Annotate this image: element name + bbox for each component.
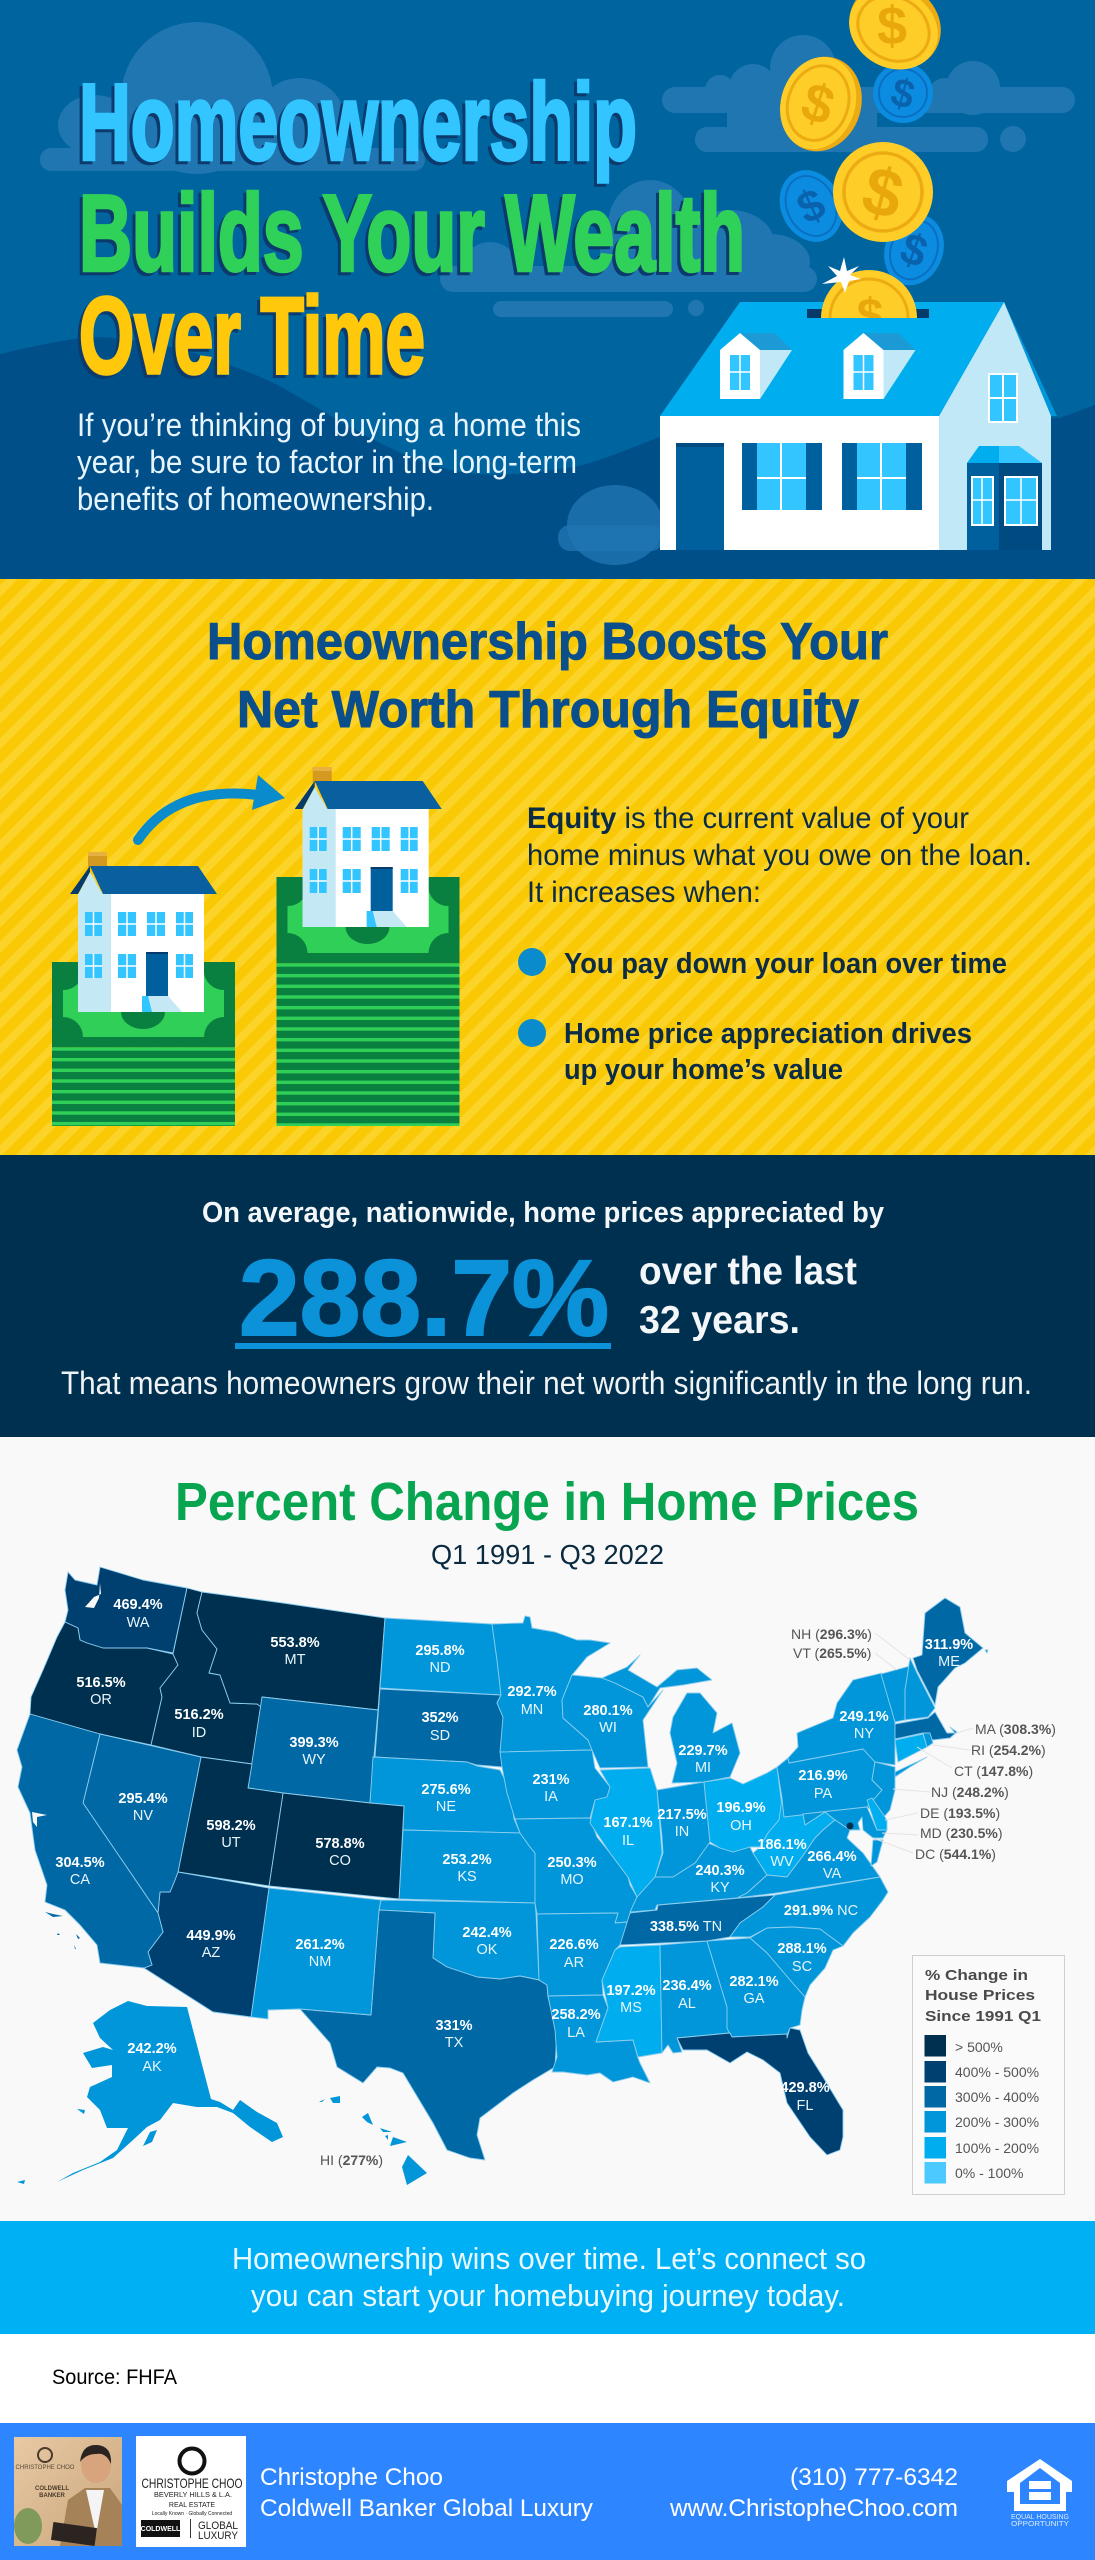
state: ME <box>913 1598 988 1705</box>
leader lines and outside labels: CT (147.8%) <box>954 1763 1033 1779</box>
equity explanation: Equity is the current value of your <box>527 802 969 835</box>
state: AL <box>660 1941 730 2053</box>
state: AR <box>537 1913 628 1996</box>
legend labels: 100% - 200% <box>955 2140 1039 2156</box>
state value labels: 429.8% <box>780 2080 830 2096</box>
legend swatches <box>924 2035 946 2184</box>
lead text: On average, nationwide, home prices appreciated by <box>202 1197 884 1229</box>
state: MN <box>492 1616 610 1752</box>
state value labels: 236.4% <box>662 1978 712 1994</box>
gable window <box>989 374 1017 422</box>
state: TX <box>300 1910 557 2160</box>
leader lines and outside labels: DC (544.1%) <box>915 1846 996 1862</box>
icon: money stack left <box>52 962 235 1126</box>
state value labels: 242.4% <box>462 1925 512 1941</box>
state: NY <box>788 1673 927 1777</box>
state value labels: LA <box>567 2025 585 2041</box>
legend labels: 200% - 300% <box>955 2114 1039 2130</box>
blue coin lower left <box>768 160 854 252</box>
door <box>676 443 724 550</box>
company logo: CHRISTOPHE CHOO <box>142 2475 243 2491</box>
state value labels: 304.5% <box>55 1855 105 1871</box>
state value labels: 217.5% <box>657 1807 707 1823</box>
state value labels: MN <box>521 1702 543 1718</box>
state value labels: WI <box>599 1720 617 1736</box>
agent name: Coldwell Banker Global Luxury <box>260 2495 593 2522</box>
state value labels: SD <box>430 1728 450 1744</box>
state value labels: KS <box>457 1869 477 1885</box>
agent photo: BANKER <box>39 2493 65 2499</box>
state: UT <box>178 1757 283 1886</box>
icon: tall house <box>295 767 442 927</box>
period text <box>639 1250 857 1342</box>
state value labels: 261.2% <box>295 1937 345 1953</box>
map title: Percent Change in Home Prices <box>175 1472 919 1532</box>
state value labels: AK <box>142 2059 162 2075</box>
panel: call to action: you can start your homebuying journey today. <box>251 2278 845 2313</box>
contact details: (310) 777-6342 <box>790 2464 958 2491</box>
icon: equal housing opportunity: EQUAL HOUSING <box>1011 2514 1069 2521</box>
state value labels: 311.9% <box>925 1637 973 1653</box>
icon: equal housing opportunity <box>1007 2459 1072 2528</box>
state: VT <box>881 1666 910 1722</box>
state: LA <box>548 1995 650 2083</box>
state: NC <box>730 1877 888 1946</box>
state: KS <box>399 1830 535 1903</box>
state value labels: 352% <box>421 1710 459 1726</box>
dormer left <box>720 333 792 399</box>
state value labels: 291.9% NC <box>784 1903 858 1919</box>
blue coin lower right <box>874 206 954 294</box>
state value labels: ME <box>938 1654 960 1670</box>
arrow <box>138 775 285 840</box>
contact details <box>669 2464 958 2522</box>
state: VA <box>737 1820 883 1898</box>
eastern states map <box>492 1598 988 2155</box>
dormer right <box>844 333 916 399</box>
western states map <box>17 1567 557 2185</box>
state: SC <box>750 1927 843 1997</box>
state value labels: 598.2% <box>206 1818 256 1834</box>
state value labels: 167.1% <box>603 1815 653 1831</box>
state value labels: IL <box>622 1833 634 1849</box>
company logo: Locally Known · Globally Connected <box>152 2511 232 2517</box>
leader lines and outside labels: MA (308.3%) <box>975 1721 1056 1737</box>
state: TN <box>620 1895 775 1945</box>
state value labels: 282.1% <box>729 1974 779 1990</box>
state: ND <box>380 1618 501 1695</box>
state: CT <box>895 1734 927 1762</box>
state value labels: 196.9% <box>716 1800 766 1816</box>
blue coin lower left: $ <box>790 179 833 234</box>
state value labels: 250.3% <box>547 1855 597 1871</box>
state value labels: SC <box>792 1959 812 1975</box>
bullet: pay down: You pay down your loan over time <box>564 948 1007 980</box>
gold coin large: $ <box>855 151 911 235</box>
gold coin top <box>833 0 957 86</box>
bullet: appreciation <box>518 1018 972 1086</box>
state value labels: OK <box>477 1942 498 1958</box>
legend <box>912 1956 1064 2194</box>
state value labels: KY <box>710 1880 730 1896</box>
equity explanation <box>527 802 1032 909</box>
state value labels: NE <box>436 1799 456 1815</box>
state value labels: 469.4% <box>113 1597 163 1613</box>
period text: over the last <box>639 1250 857 1293</box>
state value labels: 338.5% TN <box>650 1919 722 1935</box>
state value labels: MO <box>560 1872 584 1888</box>
state: OR <box>30 1622 178 1745</box>
state value labels: 516.5% <box>76 1675 126 1691</box>
leader lines and outside labels: DE (193.5%) <box>920 1805 1000 1821</box>
marker: DC <box>846 1822 854 1830</box>
state: DE <box>867 1798 887 1830</box>
state value labels: CA <box>70 1872 90 1888</box>
state: ID <box>151 1588 262 1764</box>
California islands <box>45 1912 80 1949</box>
state: NE <box>370 1757 520 1833</box>
title: Homeownership <box>79 62 637 184</box>
state: AK <box>17 2001 283 2184</box>
company logo: BEVERLY HILLS & L.A. <box>154 2492 232 2499</box>
state: NJ <box>867 1762 895 1818</box>
state value labels: TX <box>445 2035 464 2051</box>
state value labels: 258.2% <box>551 2007 601 2023</box>
state value labels: 231% <box>532 1772 570 1788</box>
state value labels: UT <box>221 1835 241 1851</box>
leader lines and outside labels: VT (265.5%) <box>793 1645 871 1661</box>
state value labels: GA <box>744 1991 765 2007</box>
state: HI <box>319 2096 427 2185</box>
state: WA <box>65 1567 187 1653</box>
agent photo: CHRISTOPHE CHOO <box>16 2465 75 2471</box>
icon: equal housing opportunity: OPPORTUNITY <box>1011 2521 1069 2528</box>
state value labels: 578.8% <box>315 1836 365 1852</box>
state value labels: 288.1% <box>777 1941 827 1957</box>
water: Puget Sound and San Francisco Bay <box>32 1583 101 1827</box>
leader lines and outside labels: NJ (248.2%) <box>931 1784 1009 1800</box>
equity explanation: home minus what you owe on the loan. <box>527 839 1032 872</box>
leader lines and outside labels: MD (230.5%) <box>920 1825 1002 1841</box>
background hills <box>0 337 1095 579</box>
panel: source: Source: FHFA <box>52 2366 177 2389</box>
coin slot <box>807 257 929 343</box>
state: WI <box>562 1675 663 1768</box>
state: MO <box>515 1818 637 1923</box>
state value labels: CO <box>329 1853 351 1869</box>
state value labels: 242.2% <box>127 2041 177 2057</box>
state: PA <box>777 1749 882 1817</box>
conclusion text: That means homeowners grow their net worth significantly in the long run. <box>61 1365 1032 1401</box>
state: NV <box>83 1734 201 1913</box>
state value labels: 197.2% <box>606 1983 656 1999</box>
state value labels: 266.4% <box>807 1849 857 1865</box>
state: IL <box>590 1768 662 1897</box>
company logo: LUXURY <box>198 2530 239 2542</box>
heading <box>207 613 888 739</box>
legend labels: > 500% <box>955 2039 1003 2055</box>
panel: call to action <box>0 2221 1095 2334</box>
agent name <box>260 2464 593 2522</box>
state value labels: OH <box>730 1818 752 1834</box>
state value labels: 295.8% <box>415 1643 465 1659</box>
agent photo: COLDWELL <box>35 2486 69 2492</box>
map subtitle: Q1 1991 - Q3 2022 <box>431 1539 664 1570</box>
intro text: year, be sure to factor in the long-term <box>77 444 577 480</box>
state value labels: PA <box>814 1786 832 1802</box>
state: MT <box>197 1592 385 1710</box>
panel: call to action: Homeownership wins over time. Let’s connect so <box>232 2241 866 2276</box>
state value labels: MS <box>620 2000 642 2016</box>
bullet: appreciation: Home price appreciation drives <box>564 1018 972 1050</box>
state value labels: 553.8% <box>270 1635 320 1651</box>
state value labels: 449.9% <box>186 1928 236 1944</box>
state value labels: 516.2% <box>174 1707 224 1723</box>
legend labels: 0% - 100% <box>955 2165 1023 2181</box>
state value labels: WA <box>127 1615 150 1631</box>
state: CO <box>269 1793 404 1899</box>
state: CA <box>17 1714 163 1968</box>
state: AZ <box>144 1872 269 2017</box>
state value labels: MT <box>285 1652 306 1668</box>
intro text: benefits of homeownership. <box>77 481 434 517</box>
panel: footer <box>0 2423 1095 2560</box>
icon: money stack right <box>276 877 460 1126</box>
state: OH <box>704 1767 782 1852</box>
state: MI <box>602 1655 740 1783</box>
state value labels: 292.7% <box>507 1684 557 1700</box>
leader lines and outside labels: RI (254.2%) <box>971 1742 1046 1758</box>
blue coin: $ <box>886 70 919 118</box>
period text: 32 years. <box>639 1299 800 1342</box>
panel: source <box>0 2334 1095 2423</box>
legend title <box>925 1967 1041 2025</box>
legend title: Since 1991 Q1 <box>925 2008 1041 2025</box>
legend title: % Change in <box>925 1967 1028 1984</box>
window right <box>842 443 922 510</box>
equity explanation: It increases when: <box>527 876 761 909</box>
big number: 288.7% <box>239 1237 609 1358</box>
gold coin middle <box>768 46 874 162</box>
state value labels: IA <box>544 1789 558 1805</box>
contact details: www.ChristopheChoo.com <box>669 2495 958 2522</box>
state value labels: 331% <box>435 2018 473 2034</box>
state value labels: ND <box>430 1660 450 1676</box>
state: MD <box>803 1807 887 1838</box>
title: Over Time <box>79 275 425 397</box>
state value labels: VA <box>823 1866 841 1882</box>
panel: nationwide statistic <box>0 1155 1095 1437</box>
state value labels: 216.9% <box>798 1768 848 1784</box>
agent name: Christophe Choo <box>260 2464 443 2491</box>
state value labels: 249.1% <box>839 1709 889 1725</box>
state value labels: 399.3% <box>289 1735 339 1751</box>
state value labels: FL <box>797 2098 813 2114</box>
state value labels: AZ <box>202 1945 220 1961</box>
leader lines and outside labels: NH (296.3%) <box>791 1626 872 1642</box>
state: MS <box>596 1945 662 2057</box>
state value labels: 240.3% <box>695 1863 745 1879</box>
state: FL <box>677 2028 843 2155</box>
state value labels: 229.7% <box>678 1743 728 1759</box>
leader lines and outside labels: HI (277%) <box>320 2152 383 2168</box>
state: NH <box>905 1658 935 1720</box>
state value labels: 186.1% <box>757 1837 807 1853</box>
bullet: appreciation: up your home’s value <box>564 1054 843 1086</box>
state value labels: AR <box>564 1955 584 1971</box>
company logo <box>136 2436 246 2547</box>
state value labels: OR <box>90 1692 112 1708</box>
blue coin lower right: $ <box>894 223 934 278</box>
intro text <box>77 407 581 517</box>
state: WV <box>753 1798 835 1877</box>
coin slot: $ <box>857 290 884 343</box>
state: GA <box>707 1938 805 2037</box>
state value labels: NV <box>133 1808 153 1824</box>
state value labels: MI <box>695 1760 711 1776</box>
window left <box>742 443 822 510</box>
legend title: House Prices <box>925 1987 1035 2004</box>
icon: small house <box>70 852 217 1012</box>
clouds <box>40 22 1075 565</box>
state: NM <box>251 1888 381 2019</box>
legend labels: 300% - 400% <box>955 2089 1039 2105</box>
state value labels: NM <box>309 1954 331 1970</box>
title: Builds Your Wealth <box>79 172 745 294</box>
state value labels: AL <box>678 1996 696 2012</box>
panel: equity <box>0 579 1095 1155</box>
state value labels: 226.6% <box>549 1937 599 1953</box>
state: RI <box>923 1733 933 1747</box>
state value labels: 253.2% <box>442 1852 492 1868</box>
heading: Homeownership Boosts Your <box>207 613 888 671</box>
title <box>79 62 745 397</box>
icon: house with coin slot <box>660 257 1057 550</box>
state: IN <box>655 1782 710 1877</box>
panel: map section <box>0 1437 1095 2221</box>
blue coin <box>873 63 933 123</box>
leader lines and outside labels <box>320 1626 1056 2168</box>
state value labels <box>55 1597 973 2114</box>
legend labels: 400% - 500% <box>955 2064 1039 2080</box>
state: KY <box>630 1843 767 1912</box>
agent photo <box>14 2437 122 2546</box>
gold coin large <box>833 142 933 242</box>
gold coin middle: $ <box>794 71 841 137</box>
state value labels: NY <box>854 1726 874 1742</box>
state: MA <box>895 1712 957 1740</box>
state value labels: IN <box>675 1824 689 1840</box>
company logo: GLOBAL <box>198 2520 238 2532</box>
intro text: If you’re thinking of buying a home this <box>77 407 581 443</box>
side entry <box>967 446 1042 550</box>
heading: Net Worth Through Equity <box>237 681 859 739</box>
state value labels: 275.6% <box>421 1782 471 1798</box>
company logo: COLDWELL <box>141 2526 181 2533</box>
state: WY <box>248 1697 378 1803</box>
company logo: REAL ESTATE <box>169 2502 215 2509</box>
state value labels: 295.4% <box>118 1791 168 1807</box>
state value labels: ID <box>192 1725 206 1741</box>
legend labels <box>955 2039 1039 2181</box>
icon: falling coins <box>768 0 957 294</box>
state value labels: WV <box>770 1854 794 1870</box>
panel: hero <box>0 0 1095 579</box>
state value labels: 280.1% <box>583 1703 633 1719</box>
state: OK <box>379 1900 539 1980</box>
state: IA <box>500 1750 610 1819</box>
state: SD <box>375 1689 503 1767</box>
state value labels: WY <box>302 1752 326 1768</box>
